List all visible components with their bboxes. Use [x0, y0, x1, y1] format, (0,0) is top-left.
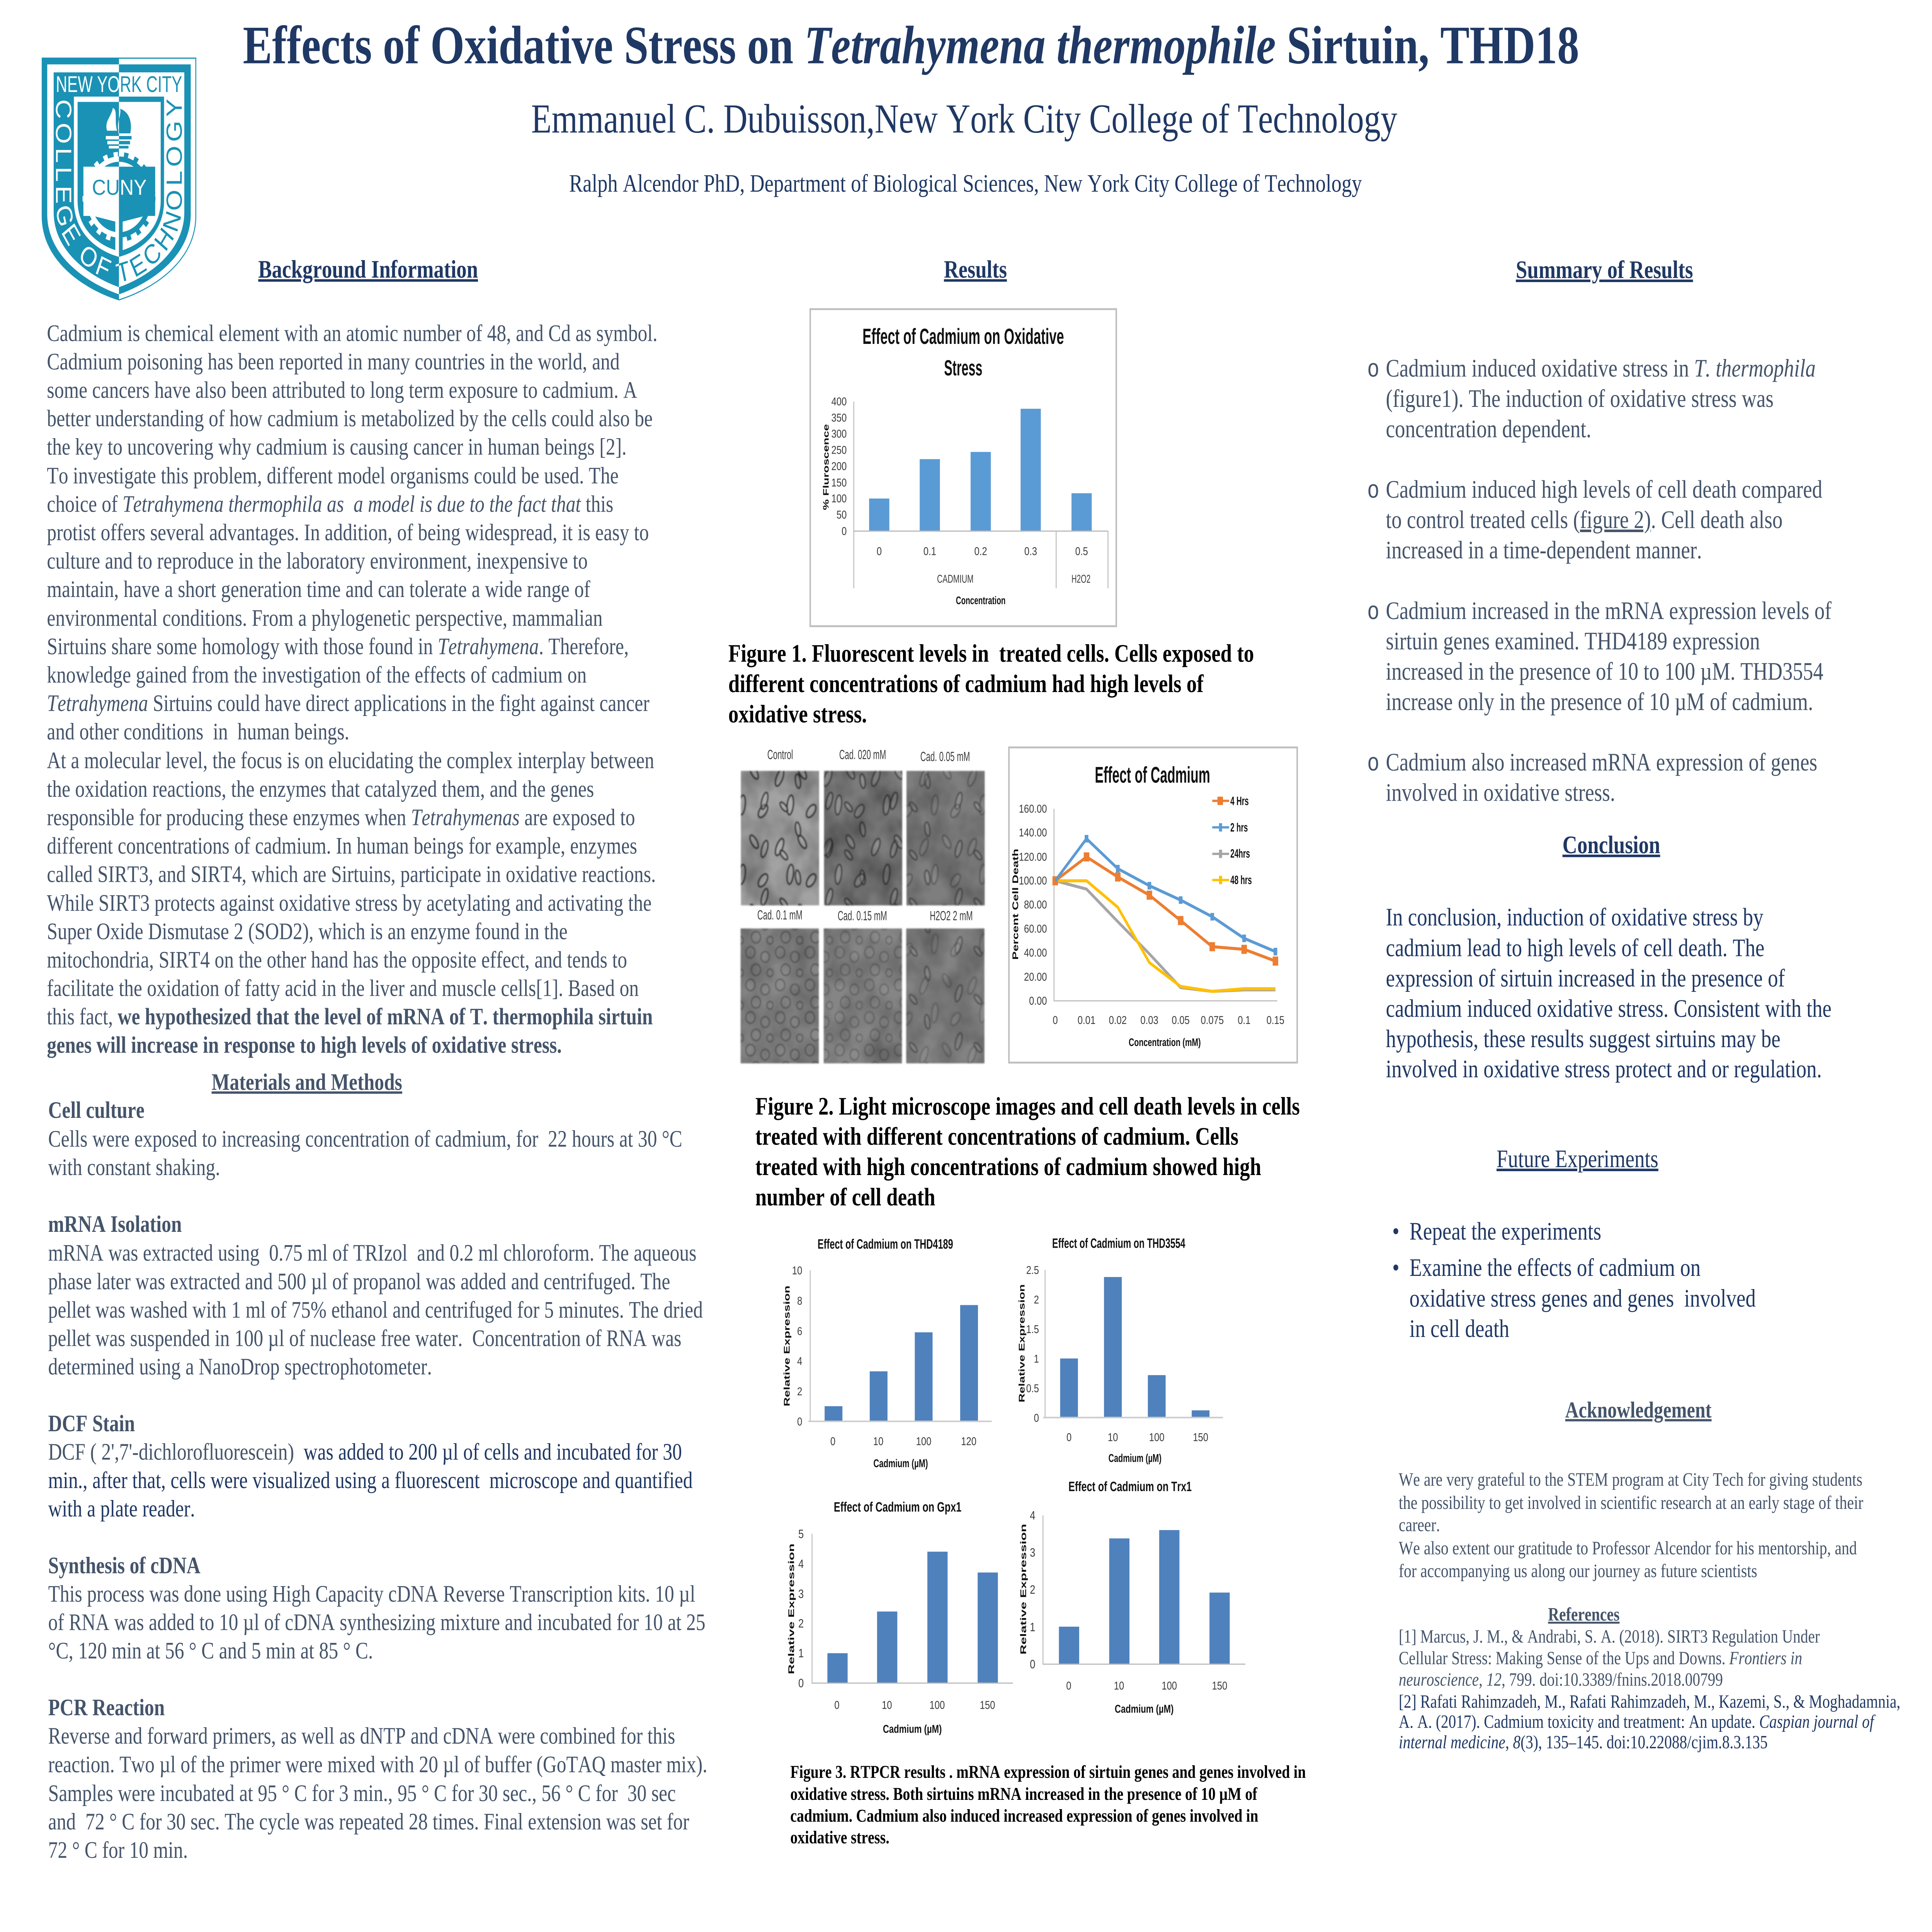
college logo shield: NEW YORK CITY [56, 71, 182, 97]
chart: effect of cadmium on percent cell death [1009, 747, 1297, 1063]
microscope image: control [741, 771, 819, 905]
text block: conclusion: cadmium induced oxidative stress. Consistent with the [1386, 995, 1832, 1022]
chart: effect of cadmium on percent cell death: 0.05 [1172, 1014, 1190, 1027]
chart: effect of cadmium on THD3554: Cadmium (µM) [1109, 1452, 1162, 1464]
panel: light microscope images [741, 747, 985, 1063]
chart: effect of cadmium on Gpx1: 0 [834, 1699, 839, 1711]
chart: effect of cadmium on THD3554: Relative Expression [1017, 1284, 1026, 1402]
chart: effect of cadmium on Gpx1: 3 [798, 1587, 804, 1600]
text block: background information: the oxidation reactions, the enzymes that catalyzed them, and the genes [47, 776, 594, 802]
chart: effect of cadmium on oxidative stress: 400 [832, 396, 847, 408]
heading: summary of results: Summary of Results [1516, 256, 1693, 284]
chart: effect of cadmium on percent cell death: 0 [1053, 1014, 1058, 1027]
heading: background information: Background Information [258, 256, 478, 283]
synthesis of cDNA: °C, 120 min at 56 ° C and 5 min at 85 ° C. [48, 1637, 373, 1664]
PCR reaction: PCR Reaction [48, 1694, 165, 1721]
caption: figure 2: treated with different concentrations of cadmium. Cells [755, 1123, 1238, 1150]
heading: acknowledgement: Acknowledgement [1565, 1398, 1712, 1423]
chart: effect of cadmium on percent cell death: 0.075 [1201, 1014, 1224, 1027]
microscope labels [757, 747, 973, 923]
chart: effect of cadmium on THD3554: 0 [1066, 1431, 1071, 1444]
text block: background information: Cadmium poisoning has been reported in many countries in the world, and [47, 348, 620, 375]
PCR reaction: and 72 ° C for 30 sec. The cycle was repeated 28 times. Final extension was set for [48, 1808, 689, 1835]
legend: 2 hrs [1230, 821, 1248, 834]
result item 3: o [1367, 598, 1379, 627]
cell culture: Cells were exposed to increasing concentration of cadmium, for 22 hours at 30 °C [48, 1126, 682, 1152]
result item 4: o [1367, 750, 1379, 779]
chart: effect of cadmium on THD3554: 2 [1034, 1294, 1039, 1306]
caption: figure 2 [755, 1092, 1300, 1211]
microscope image: cad 0.15 mM [824, 929, 902, 1063]
text block: background information: Tetrahymena Sirtuins could have direct applications in the fight against cancer [47, 690, 650, 716]
result item 4: Cadmium also increased mRNA expression of genes [1386, 748, 1817, 776]
result item 1: Cadmium induced oxidative stress in T. thermophila [1386, 355, 1816, 382]
series: 48 hrs [1055, 881, 1276, 992]
chart: effect of cadmium on percent cell death: 20.00 [1024, 971, 1047, 983]
chart: effect of cadmium on percent cell death: 60.00 [1024, 923, 1047, 935]
series: 24 hrs [1055, 881, 1276, 992]
chart: effect of cadmium on THD3554: 10 [1108, 1431, 1118, 1444]
text block: background information [47, 320, 658, 1058]
legend: 4 Hrs [1230, 794, 1249, 808]
text block: materials and methods [48, 1097, 707, 1863]
mRNA isolation: mRNA Isolation [48, 1211, 182, 1237]
text block: acknowledgement: for accompanying us along our journey as future scientists [1399, 1560, 1757, 1581]
list: future experiments: • [1392, 1254, 1400, 1282]
text block: conclusion [1386, 903, 1832, 1083]
text block: acknowledgement: the possibility to get involved in scientific research at an early stage of their [1399, 1492, 1863, 1513]
chart: effect of cadmium on percent cell death: 80.00 [1024, 898, 1047, 911]
text block: conclusion: In conclusion, induction of oxidative stress by [1386, 903, 1764, 931]
cell culture: with constant shaking. [48, 1154, 220, 1180]
result item 3: Cadmium increased in the mRNA expression levels of [1386, 597, 1832, 625]
result item 3: increase only in the presence of 10 µM of cadmium. [1386, 688, 1813, 716]
legend: 24hrs [1230, 847, 1250, 860]
microscope image: cad 020 mM [824, 771, 902, 905]
DCF stain: DCF ( 2',7'-dichlorofluorescein) was added to 200 µl of cells and incubated for 30 [48, 1439, 682, 1465]
PCR reaction: Samples were incubated at 95 ° C for 3 min., 95 ° C for 30 sec., 56 ° C for 30 sec [48, 1780, 676, 1806]
text block: background information: called SIRT3, and SIRT4, which are Sirtuins, participate in oxidative reactions. [47, 861, 656, 887]
caption: figure 1: oxidative stress. [728, 701, 867, 728]
chart: effect of cadmium on oxidative stress: 250 [832, 444, 847, 456]
chart: effect of cadmium on THD4189: Cadmium (µM) [873, 1458, 928, 1470]
chart: effect of cadmium on percent cell death: 100.00 [1019, 875, 1047, 887]
result item 4 [1367, 748, 1817, 806]
chart: effect of cadmium on Gpx1: 100 [930, 1699, 945, 1711]
result item 4: involved in oxidative stress. [1386, 779, 1615, 806]
list: future experiments: in cell death [1410, 1315, 1509, 1343]
chart: effect of cadmium on THD4189 [782, 1236, 992, 1470]
result item 3 [1367, 597, 1832, 716]
mRNA isolation [48, 1211, 703, 1380]
mRNA isolation: phase later was extracted and 500 µl of propanol was added and centrifuged. The [48, 1268, 670, 1294]
mRNA isolation: determined using a NanoDrop spectrophotometer. [48, 1353, 432, 1380]
chart: effect of cadmium on THD3554: 150 [1193, 1431, 1208, 1444]
caption: figure 2: Figure 2. Light microscope images and cell death levels in cells [755, 1092, 1300, 1120]
caption: figure 3 [790, 1762, 1306, 1847]
list: future experiments [1392, 1218, 1756, 1343]
chart: effect of cadmium on Gpx1: 10 [882, 1699, 892, 1711]
microscope image: H2O2 2 mM [906, 929, 985, 1063]
caption: figure 3: cadmium. Cadmium also induced increased expression of genes involved in [790, 1806, 1258, 1826]
reference 1: [1] Marcus, J. M., & Andrabi, S. A. (2018). SIRT3 Regulation Under [1399, 1626, 1820, 1647]
chart: effect of cadmium on oxidative stress: Stress [944, 356, 982, 380]
result item 3: sirtuin genes examined. THD4189 expression [1386, 628, 1760, 655]
list: future experiments: Repeat the experiments [1410, 1218, 1601, 1245]
chart: effect of cadmium on percent cell death: 0.02 [1109, 1014, 1127, 1027]
text block: acknowledgement: We also extent our gratitude to Professor Alcendor for his mentorship, and [1399, 1537, 1857, 1558]
text block: background information: genes will increase in response to high levels of oxidative stress. [47, 1032, 562, 1058]
text block: background information: facilitate the oxidation of fatty acid in the liver and muscle cells[1]. Based on [47, 975, 639, 1001]
chart: effect of cadmium on Trx1: 4 [1030, 1509, 1035, 1522]
text block: background information: protist offers several advantages. In addition, of being widespread, it is easy to [47, 519, 649, 546]
chart: effect of cadmium on THD4189: 6 [797, 1325, 802, 1338]
synthesis of cDNA [48, 1552, 706, 1664]
chart: effect of cadmium on THD4189: Effect of Cadmium on THD4189 [818, 1236, 953, 1252]
reference 1: Cellular Stress: Making Sense of the Ups and Downs. Frontiers in [1399, 1648, 1802, 1668]
microscope labels: Cad. 0.05 mM [920, 749, 970, 764]
list: future experiments: oxidative stress genes and genes involved [1410, 1285, 1756, 1312]
heading: conclusion: Conclusion [1563, 831, 1660, 859]
synthesis of cDNA: of RNA was added to 10 µl of cDNA synthesizing mixture and incubated for 10 at 25 [48, 1609, 706, 1635]
text block: conclusion: expression of sirtuin increased in the presence of [1386, 964, 1785, 992]
chart: effect of cadmium on Trx1: 150 [1212, 1680, 1227, 1692]
text block: background information: mitochondria, SIRT4 on the other hand has the opposite effect, and tends to [47, 946, 627, 973]
chart: effect of cadmium on percent cell death: Percent Cell Death [1011, 849, 1020, 960]
list: future experiments: Examine the effects of cadmium on [1410, 1254, 1701, 1282]
reference 1: neuroscience, 12, 799. doi:10.3389/fnins.2018.00799 [1399, 1669, 1723, 1690]
caption: figure 1: different concentrations of cadmium had high levels of [728, 670, 1204, 698]
college logo shield: NEW YORK CITY [56, 71, 182, 97]
caption: figure 1 [728, 640, 1254, 728]
chart: effect of cadmium on THD3554: 1 [1034, 1353, 1039, 1365]
chart: effect of cadmium on Trx1: 1 [1030, 1620, 1035, 1634]
microscope labels: Cad. 020 mM [839, 747, 886, 762]
mRNA isolation: pellet was washed with 1 ml of 75% ethanol and centrifuged for 5 minutes. The dried [48, 1296, 703, 1323]
result item 2: to control treated cells (figure 2). Cell death also [1386, 506, 1782, 534]
chart: effect of cadmium on percent cell death: Effect of Cadmium [1095, 762, 1210, 787]
chart: effect of cadmium on percent cell death: 160.00 [1019, 803, 1047, 815]
chart: effect of cadmium on THD4189: 8 [797, 1295, 802, 1307]
chart: effect of cadmium on THD3554: 0 [1034, 1412, 1039, 1424]
text block: background information: culture and to reproduce in the laboratory environment, inexpensive to [47, 548, 588, 574]
cell culture [48, 1097, 682, 1180]
text block: acknowledgement [1399, 1469, 1863, 1581]
chart: effect of cadmium on THD4189: 100 [916, 1435, 931, 1448]
result item 2 [1367, 476, 1822, 564]
caption: figure 3: Figure 3. RTPCR results . mRNA expression of sirtuin genes and genes involved in [790, 1762, 1306, 1782]
college logo shield: COLLEGE OF TECHNOLOGY [50, 95, 187, 289]
text block: background information: Super Oxide Dismutase 2 (SOD2), which is an enzyme found in the [47, 918, 568, 944]
result item 1: concentration dependent. [1386, 415, 1591, 443]
text block: acknowledgement: career. [1399, 1514, 1440, 1536]
heading: results: Results [944, 256, 1007, 283]
series: 4 hrs [1053, 852, 1278, 966]
advisor and department line: Ralph Alcendor PhD, Department of Biological Sciences, New York City College of Technology [569, 170, 1362, 197]
text block: conclusion: involved in oxidative stress protect and or regulation. [1386, 1055, 1822, 1083]
chart: effect of cadmium on Gpx1: Effect of Cadmium on Gpx1 [834, 1499, 961, 1515]
chart: effect of cadmium on oxidative stress: 0.2 [975, 545, 987, 558]
chart: effect of cadmium on oxidative stress [810, 309, 1116, 626]
caption: figure 2: treated with high concentrations of cadmium showed high [755, 1153, 1261, 1181]
DCF stain: with a plate reader. [48, 1495, 195, 1522]
reference 2: A. A. (2017). Cadmium toxicity and treatment: An update. Caspian journal of [1399, 1711, 1876, 1732]
synthesis of cDNA: Synthesis of cDNA [48, 1552, 201, 1578]
chart: effect of cadmium on Gpx1: 0 [798, 1676, 804, 1690]
result item 1: (figure1). The induction of oxidative stress was [1386, 385, 1774, 413]
chart: effect of cadmium on oxidative stress: 300 [832, 428, 847, 440]
chart: effect of cadmium on THD4189: 0 [797, 1416, 802, 1428]
chart: effect of cadmium on oxidative stress: CADMIUM [937, 573, 973, 585]
chart: effect of cadmium on oxidative stress: H2O2 [1071, 573, 1090, 585]
DCF stain: DCF Stain [48, 1410, 135, 1437]
text block: background information: To investigate this problem, different model organisms could be used. The [47, 462, 619, 489]
text block: background information: maintain, have a short generation time and can tolerate a wide range of [47, 576, 590, 602]
heading: references: References [1548, 1604, 1619, 1625]
chart: effect of cadmium on Gpx1: 5 [798, 1527, 804, 1541]
chart: effect of cadmium on oxidative stress: 350 [832, 412, 847, 424]
microscope labels: H2O2 2 mM [930, 908, 973, 923]
text block: conclusion: hypothesis, these results suggest sirtuins may be [1386, 1025, 1781, 1053]
text block: background information: environmental conditions. From a phylogenetic perspective, mammalian [47, 605, 603, 631]
chart: effect of cadmium on percent cell death: 140.00 [1019, 827, 1047, 839]
chart: effect of cadmium on Gpx1: Relative Expression [787, 1544, 796, 1674]
chart: effect of cadmium on Trx1: Relative Expression [1019, 1524, 1028, 1655]
chart: effect of cadmium on Gpx1: Cadmium (µM) [883, 1723, 942, 1735]
mRNA isolation: pellet was suspended in 100 µl of nuclease free water. Concentration of RNA was [48, 1325, 681, 1351]
list: future experiments: • [1392, 1218, 1400, 1245]
chart: effect of cadmium on percent cell death: 0.15 [1267, 1014, 1284, 1027]
chart: effect of cadmium on Trx1: Cadmium (µM) [1115, 1703, 1173, 1715]
result item 2: Cadmium induced high levels of cell death compared [1386, 476, 1822, 503]
chart: effect of cadmium on Trx1: 2 [1030, 1583, 1035, 1596]
chart: effect of cadmium on THD4189: 0 [830, 1435, 835, 1448]
chart: effect of cadmium on THD4189: 2 [797, 1385, 802, 1398]
chart: effect of cadmium on THD3554: 100 [1149, 1431, 1165, 1444]
chart: effect of cadmium on Trx1: 0 [1066, 1680, 1071, 1692]
chart: effect of cadmium on Gpx1: 4 [798, 1557, 804, 1571]
text block: references [1399, 1626, 1900, 1752]
cell culture: Cell culture [48, 1097, 145, 1123]
series: 2 hrs [1055, 835, 1277, 956]
chart: effect of cadmium on oxidative stress: Effect of Cadmium on Oxidative [862, 324, 1064, 349]
chart: effect of cadmium on oxidative stress: % Fluroscence [821, 424, 830, 510]
author line: Emmanuel C. Dubuisson,New York City College of Technology [531, 96, 1398, 142]
chart: effect of cadmium on percent cell death: Concentration (mM) [1129, 1036, 1201, 1049]
synthesis of cDNA: This process was done using High Capacity cDNA Reverse Transcription kits. 10 µl [48, 1580, 695, 1607]
chart: effect of cadmium on Trx1 [1019, 1478, 1245, 1715]
text block: background information: the key to uncovering why cadmium is causing cancer in human beings [2]. [47, 434, 627, 460]
chart: effect of cadmium on percent cell death: 120.00 [1019, 851, 1047, 863]
text block: background information: choice of Tetrahymena thermophila as a model is due to the fact that this [47, 491, 613, 517]
chart: effect of cadmium on oxidative stress: 150 [832, 476, 847, 489]
chart: effect of cadmium on percent cell death: 40.00 [1024, 947, 1047, 959]
chart: effect of cadmium on Trx1: 0 [1030, 1657, 1035, 1671]
chart: effect of cadmium on THD3554 [1017, 1235, 1223, 1464]
text block: acknowledgement: We are very grateful to the STEM program at City Tech for giving students [1399, 1469, 1862, 1490]
reference 2: internal medicine, 8(3), 135–145. doi:10.22088/cjim.8.3.135 [1399, 1731, 1768, 1752]
text block: background information: At a molecular level, the focus is on elucidating the complex interplay between [47, 747, 654, 774]
text block: summary of results [1367, 355, 1832, 806]
legend: 48 hrs [1230, 873, 1252, 887]
microscope labels: Control [767, 747, 793, 762]
chart: effect of cadmium on THD4189: 4 [797, 1355, 802, 1367]
college logo shield: CUNY [92, 175, 146, 200]
text block: background information: better understanding of how cadmium is metabolized by the cells could also be [47, 405, 653, 432]
chart: effect of cadmium on Gpx1: 2 [798, 1616, 804, 1630]
chart: effect of cadmium on THD4189: 10 [792, 1265, 802, 1277]
chart: effect of cadmium on Gpx1: 1 [798, 1646, 804, 1660]
chart: effect of cadmium on THD3554: Effect of Cadmium on THD3554 [1052, 1235, 1185, 1251]
chart: effect of cadmium on THD4189: Relative Expression [782, 1286, 791, 1406]
microscope labels: Cad. 0.15 mM [838, 908, 887, 923]
text block: background information: and other conditions in human beings. [47, 718, 349, 745]
chart: effect of cadmium on oxidative stress: Concentration [956, 595, 1005, 607]
caption: figure 3: oxidative stress. [790, 1827, 889, 1847]
title: Effects of Oxidative Stress on Tetrahymena thermophile Sirtuin, THD18 [243, 15, 1579, 75]
DCF stain [48, 1410, 693, 1522]
chart: effect of cadmium on oxidative stress: 100 [832, 493, 847, 505]
chart: effect of cadmium on oxidative stress: 0 [877, 545, 882, 558]
chart: effect of cadmium on Trx1: Effect of Cadmium on Trx1 [1068, 1478, 1192, 1494]
text block: background information: Sirtuins share some homology with those found in Tetrahymena. Therefore, [47, 633, 629, 660]
heading: materials and methods: Materials and Methods [212, 1069, 402, 1095]
text block: conclusion: cadmium lead to high levels of cell death. The [1386, 934, 1764, 962]
text block: background information: different concentrations of cadmium. In human beings for example, enzymes [47, 832, 637, 859]
result item 3: increased in the presence of 10 to 100 µM. THD3554 [1386, 658, 1823, 685]
mRNA isolation: mRNA was extracted using 0.75 ml of TRIzol and 0.2 ml chloroform. The aqueous [48, 1240, 696, 1266]
chart: effect of cadmium on percent cell death: 0.01 [1078, 1014, 1095, 1027]
chart: effect of cadmium on oxidative stress: 0.3 [1024, 545, 1037, 558]
chart: effect of cadmium on percent cell death: 0.03 [1140, 1014, 1158, 1027]
chart: effect of cadmium on THD4189: 120 [961, 1435, 976, 1448]
caption: figure 2: number of cell death [755, 1184, 935, 1211]
legend [1212, 794, 1252, 887]
chart: effect of cadmium on percent cell death: 0.1 [1238, 1014, 1250, 1027]
chart: effect of cadmium on Trx1: 100 [1162, 1680, 1177, 1692]
text block: background information: knowledge gained from the investigation of the effects of cadmium on [47, 662, 587, 688]
chart: effect of cadmium on Trx1: 10 [1114, 1680, 1124, 1692]
text block: background information: some cancers have also been attributed to long term exposure to cadmium. A [47, 377, 637, 403]
result item 2: increased in a time-dependent manner. [1386, 536, 1702, 564]
text block: background information: responsible for producing these enzymes when Tetrahymenas are exposed to [47, 804, 635, 830]
microscope labels: Cad. 0.1 mM [757, 908, 803, 922]
PCR reaction: 72 ° C for 10 min. [48, 1837, 188, 1863]
PCR reaction: reaction. Two µl of the primer were mixed with 20 µl of buffer (GoTAQ master mix). [48, 1751, 707, 1777]
chart: effect of cadmium on oxidative stress: 0 [842, 525, 847, 537]
chart: effect of cadmium on oxidative stress: 0.1 [923, 545, 936, 558]
DCF stain: min., after that, cells were visualized using a fluorescent microscope and quantified [48, 1467, 693, 1493]
reference 1 [1399, 1626, 1820, 1690]
chart: effect of cadmium on THD3554: 1.5 [1026, 1323, 1039, 1336]
result item 1: o [1367, 356, 1379, 384]
chart: effect of cadmium on Trx1: 3 [1030, 1546, 1035, 1559]
chart: effect of cadmium on THD4189: 10 [873, 1435, 883, 1448]
microscope image: cad 0.05 mM [906, 771, 985, 905]
caption: figure 3: oxidative stress. Both sirtuins mRNA increased in the presence of 10 µM of [790, 1784, 1258, 1804]
college logo shield: COLLEGE OF TECHNOLOGY [50, 95, 187, 289]
chart: effect of cadmium on Gpx1 [787, 1499, 1013, 1735]
chart: effect of cadmium on oxidative stress: 0.5 [1075, 545, 1088, 558]
heading: future experiments: Future Experiments [1497, 1145, 1658, 1173]
chart: effect of cadmium on oxidative stress: 200 [832, 460, 847, 473]
chart: effect of cadmium on Gpx1: 150 [980, 1699, 995, 1711]
PCR reaction [48, 1694, 707, 1863]
chart: effect of cadmium on oxidative stress: 50 [837, 509, 847, 521]
text block: background information: this fact, we hypothesized that the level of mRNA of T. thermophila sirtuin [47, 1003, 653, 1030]
chart: effect of cadmium on THD3554: 0.5 [1026, 1382, 1039, 1395]
reference 2: [2] Rafati Rahimzadeh, M., Rafati Rahimzadeh, M., Kazemi, S., & Moghadamnia, [1399, 1691, 1900, 1712]
reference 2 [1399, 1691, 1900, 1752]
PCR reaction: Reverse and forward primers, as well as dNTP and cDNA were combined for this [48, 1723, 675, 1749]
college logo shield: CUNY [92, 175, 146, 200]
text block: background information: Cadmium is chemical element with an atomic number of 48, and Cd as symbol. [47, 320, 658, 346]
text block: background information: While SIRT3 protects against oxidative stress by acetylating and activating the [47, 889, 651, 916]
result item 1 [1367, 355, 1816, 443]
microscope image: cad 0.1 mM [741, 929, 819, 1063]
chart: effect of cadmium on percent cell death: 0.00 [1029, 995, 1047, 1007]
result item 2: o [1367, 477, 1379, 506]
chart: effect of cadmium on THD3554: 2.5 [1026, 1264, 1039, 1277]
caption: figure 1: Figure 1. Fluorescent levels in treated cells. Cells exposed to [728, 640, 1254, 667]
